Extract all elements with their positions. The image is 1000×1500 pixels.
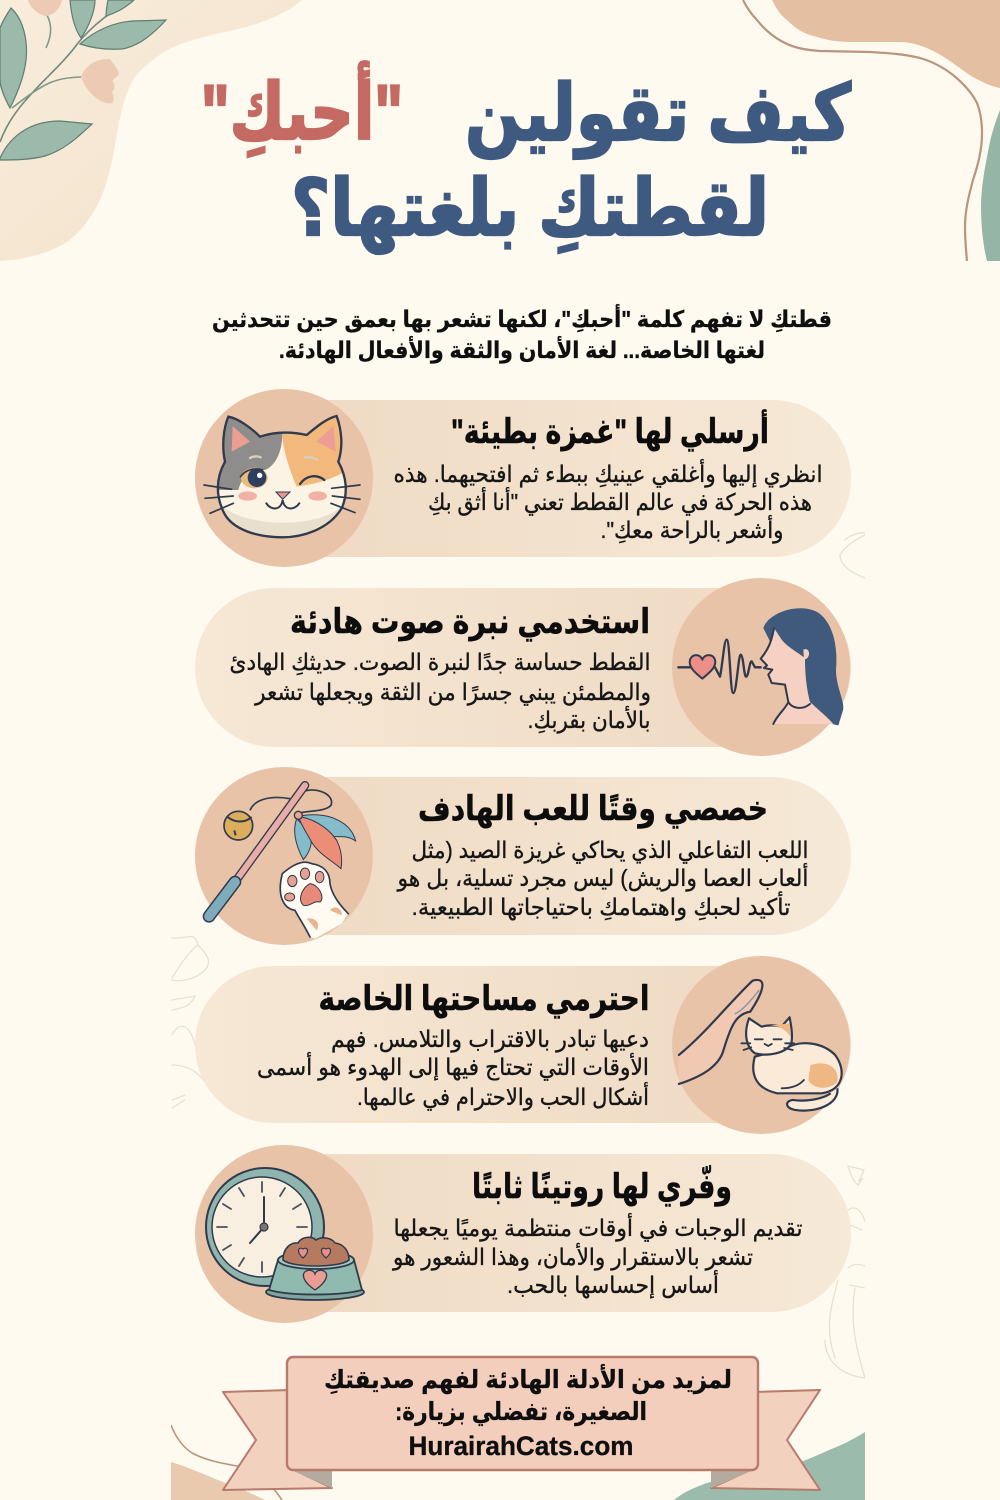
card 2: calm voice xyxy=(195,578,851,756)
ribbon centre xyxy=(287,1357,758,1470)
icon: woman speaking with heart wave xyxy=(678,608,843,725)
header decoration: top-left blob with leaves xyxy=(0,0,302,261)
feathers xyxy=(297,815,356,841)
leaf xyxy=(106,0,134,16)
body: اللعب التفاعلي الذي يحاكي غريزة الصيد (مثل xyxy=(412,837,808,864)
body xyxy=(257,1026,649,1111)
card 1: slow blink xyxy=(195,389,851,567)
intro text: قطتكِ لا تفهم كلمة "أحبكِ"، لكنها تشعر بها بعمق حين تتحدثين xyxy=(212,303,832,333)
pill background xyxy=(195,400,851,557)
flower xyxy=(81,59,119,103)
heading: استخدمي نبرة صوت هادئة xyxy=(290,603,650,642)
body xyxy=(394,459,822,544)
bowl heart xyxy=(303,1270,327,1290)
circle xyxy=(195,767,373,945)
body: القطط حساسة جدًا لنبرة الصوت. حديثكِ الهادئ xyxy=(230,649,650,676)
leaf xyxy=(0,8,26,108)
bell xyxy=(224,811,253,840)
body: تشعر بالاستقرار والأمان، وهذا الشعور هو xyxy=(392,1243,753,1271)
cat body xyxy=(753,1043,842,1093)
nose and mouth xyxy=(276,492,290,499)
pill background xyxy=(195,1154,851,1312)
title line 2: لقطتكِ بلغتها؟ xyxy=(291,164,769,254)
intro text: لغتها الخاصة... لغة الأمان والثقة والأفعال الهادئة. xyxy=(279,335,765,364)
circle xyxy=(672,956,850,1134)
banner text: HurairahCats.com xyxy=(408,1431,634,1461)
heading: وفّري لها روتينًا ثابتًا xyxy=(472,1166,732,1207)
pill background xyxy=(195,777,851,935)
pill background xyxy=(195,966,851,1123)
body xyxy=(397,837,808,921)
hand xyxy=(679,980,762,1084)
string xyxy=(250,790,332,814)
paw xyxy=(280,862,348,939)
leaf xyxy=(70,0,95,38)
icon: clock and food bowl xyxy=(206,1168,364,1300)
icon: raised hand and sleeping cat xyxy=(679,980,842,1111)
icon: feather wand toy, bell and paw xyxy=(209,785,356,939)
title xyxy=(201,61,852,254)
faint side flowers xyxy=(171,533,865,1378)
cat head xyxy=(746,1017,792,1055)
wink xyxy=(300,476,324,484)
right tail xyxy=(711,1390,820,1490)
body: أساس إحساسها بالحب. xyxy=(507,1270,719,1299)
banner text: الصغيرة، تفضلي بزيارة: xyxy=(395,1398,647,1427)
left fold xyxy=(289,1469,332,1488)
banner: call to action ribbon xyxy=(223,1357,820,1490)
sound wave xyxy=(678,640,761,693)
card 5: steady routine xyxy=(195,1145,851,1323)
header decoration: top-right blobs and line xyxy=(743,0,1000,261)
heading: خصصي وقتًا للعب الهادف xyxy=(418,790,768,829)
body: تقديم الوجبات في أوقات منتظمة يوميًا يجعلها xyxy=(394,1213,802,1242)
body: وأشعر بالراحة معكِ". xyxy=(600,515,784,544)
leaf xyxy=(0,121,92,160)
body: تأكيد لحبكِ واهتمامكِ باحتياجاتها الطبيعية. xyxy=(412,891,790,921)
banner text: لمزيد من الأدلة الهادئة لفهم صديقتكِ xyxy=(324,1364,732,1395)
body: والمطمئن يبني جسرًا من الثقة ويجعلها تشعر xyxy=(254,679,651,706)
title line 1: blue part: كيف تقولين xyxy=(465,69,852,159)
food xyxy=(283,1237,349,1266)
circle xyxy=(195,389,373,567)
title line 1: red quoted word: "أحبكِ" xyxy=(201,61,403,158)
flower xyxy=(28,0,62,16)
body: بالأمان بقربكِ. xyxy=(528,706,650,734)
heading: أرسلي لها "غمزة بطيئة" xyxy=(451,409,769,452)
wand xyxy=(235,785,305,882)
left tail xyxy=(223,1390,332,1490)
leaf xyxy=(80,20,166,49)
pill background xyxy=(195,588,851,747)
cheeks xyxy=(238,491,257,501)
icon: calico cat face winking xyxy=(204,407,360,538)
body: ألعاب العصا والريش) ليس مجرد تسلية، بل هو xyxy=(397,863,808,892)
body xyxy=(230,649,651,734)
clock xyxy=(206,1168,324,1286)
heading: احترمي مساحتها الخاصة xyxy=(318,980,650,1019)
bottom decoration xyxy=(171,1425,865,1500)
body: الأوقات التي تحتاج فيها إلى الهدوء هو أسمى xyxy=(257,1052,649,1081)
body: دعيها تبادر بالاقتراب والتلامس. فهم xyxy=(331,1026,649,1053)
bowl xyxy=(266,1284,364,1300)
heart xyxy=(690,655,715,679)
card 3: purposeful play xyxy=(195,767,851,945)
right fold xyxy=(711,1469,756,1488)
circle xyxy=(195,1145,373,1323)
body: انظري إليها وأغلقي عينيكِ ببطء ثم افتحيهما. هذه xyxy=(394,459,822,488)
intro text xyxy=(212,303,832,364)
banner text xyxy=(324,1364,732,1461)
body xyxy=(392,1213,802,1299)
body: هذه الحركة في عالم القطط تعني "أنا أثق بكِ xyxy=(428,487,812,516)
whiskers xyxy=(204,485,360,513)
card 4: respect her space xyxy=(195,956,851,1134)
eye xyxy=(241,468,268,488)
body: أشكال الحب والاحترام في عالمها. xyxy=(357,1082,649,1111)
ears xyxy=(232,426,250,452)
circle xyxy=(672,578,850,756)
